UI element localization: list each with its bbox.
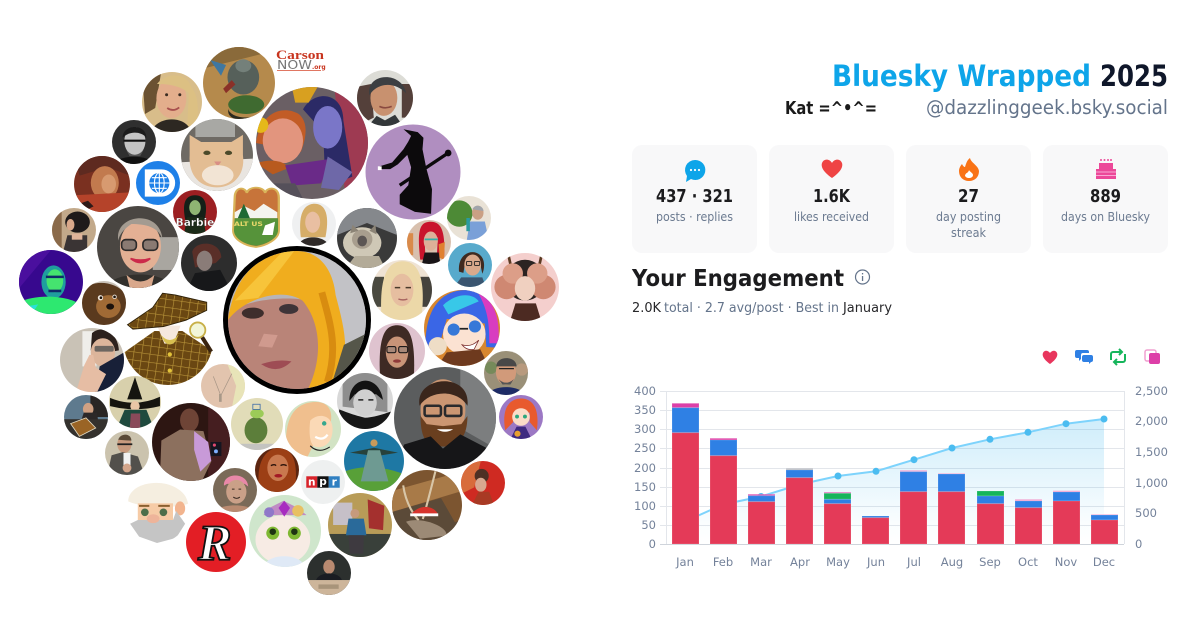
- avatar: dark-haired woman from behind: [52, 208, 96, 252]
- icon: legend reposts: [1111, 349, 1125, 365]
- avatar: man in beanie: [357, 70, 413, 126]
- avatar: two fantasy anime characters: [253, 87, 368, 199]
- left axis labels: 200: [634, 461, 656, 475]
- icon: legend likes: [1043, 351, 1057, 364]
- icon: birthday cake: [1096, 159, 1116, 179]
- avatar: Barbie pin-up: [173, 190, 217, 234]
- month labels: Feb: [713, 555, 733, 569]
- avatar: man taking mirror selfie: [105, 431, 149, 475]
- left axis labels: 300: [634, 422, 656, 436]
- value: 27: [958, 186, 979, 207]
- handle: @dazzlinggeek.bsky.social: [926, 96, 1168, 119]
- logo: CarsonNow.org: [276, 47, 326, 72]
- avatar: blonde woman: [142, 72, 202, 132]
- month labels: [675, 555, 1115, 569]
- avatar: flower crown creature: [249, 495, 321, 567]
- avatar: cartoon brunette with glasses: [448, 243, 492, 287]
- bar: Feb: [710, 438, 737, 544]
- avatar: red-haired glam portrait: [255, 448, 299, 492]
- bar: Jan: [672, 403, 699, 544]
- avatar: black and white woman: [337, 373, 393, 429]
- cumulative line: [685, 416, 1108, 522]
- label: days on Bluesky: [1061, 210, 1150, 224]
- avatar: witch hat figure: [109, 376, 161, 428]
- month labels: Aug: [941, 555, 963, 569]
- chart: monthly engagement stacked bars with cumulative line: [634, 384, 1168, 569]
- right axis labels: 0: [1135, 537, 1142, 551]
- avatar: painted miniature: [203, 47, 275, 121]
- avatar: necklace on pale skin: [201, 364, 245, 408]
- display name: Kat =^•^=: [785, 98, 877, 119]
- bar: Nov: [1053, 491, 1080, 544]
- left axis labels: 150: [634, 480, 656, 494]
- label: streak: [951, 226, 986, 240]
- icon: info: [856, 270, 870, 284]
- avatar: antlered curly-haired girl: [491, 253, 559, 321]
- chart legend icons: [1043, 349, 1160, 365]
- icon: heart: [822, 160, 842, 178]
- left axis labels: 100: [634, 499, 656, 513]
- icon: chat bubble: [685, 160, 705, 182]
- avatar: bearded man with glasses: [394, 367, 496, 469]
- logo: CarsonNow.org: NOW: [277, 58, 312, 72]
- left axis labels: 50: [641, 518, 656, 532]
- avatar: pink-haired woman: [213, 468, 257, 512]
- avatar: bearded cartoon old man: [128, 483, 188, 543]
- bar: Dec: [1091, 514, 1118, 544]
- month labels: Oct: [1018, 555, 1038, 569]
- bar: Jul: [900, 470, 927, 544]
- avatar: NPR logo: n: [308, 477, 316, 489]
- month labels: Jan: [675, 555, 694, 569]
- bars: [672, 403, 1118, 544]
- heading: Bluesky Wrapped 2025: Bluesky Wrapped: [832, 59, 1091, 93]
- bar: Mar: [748, 494, 775, 544]
- month labels: Jun: [866, 555, 885, 569]
- value: 437 · 321: [656, 186, 733, 207]
- month labels: Jul: [906, 555, 921, 569]
- avatar: cartoon brunette on pink: [369, 323, 425, 379]
- panel: avatar bubble cloud: [19, 47, 559, 595]
- main avatar: woman with yellow hair: [223, 246, 371, 394]
- bar: Aug: [938, 473, 965, 544]
- avatar: man with glasses, black and white: [112, 120, 156, 164]
- avatar: Barbie pin-up: Barbie: [176, 217, 214, 229]
- panel: likes stat card: [769, 145, 894, 253]
- avatar: blue-pink anime girl with glasses: [424, 290, 500, 366]
- month labels: Nov: [1055, 555, 1077, 569]
- icon: legend replies: [1075, 350, 1093, 364]
- avatar: Alt US National Park badge: ALT US: [234, 221, 263, 228]
- left axis labels: [634, 384, 656, 551]
- right axis labels: 500: [1135, 506, 1157, 520]
- left axis labels: 400: [634, 384, 656, 398]
- label: [936, 210, 1001, 240]
- bar: Jun: [862, 516, 889, 544]
- avatar: cat in cone: [337, 208, 397, 268]
- avatar: NPR logo: p: [319, 476, 327, 488]
- avatar: woman standing outside shop: [328, 493, 392, 557]
- icon: legend quotes: [1145, 350, 1160, 364]
- avatar: purple dancer silhouette: [366, 124, 460, 220]
- engagement summary text: 2.0K: [632, 300, 662, 316]
- bar: Apr: [786, 468, 813, 544]
- avatar: red-haired woman with glasses: [407, 220, 451, 264]
- avatar: neon purple-green portrait: [19, 250, 83, 314]
- avatar: smiling man in blue shirt: [484, 351, 528, 395]
- engagement summary text: total · 2.7 avg/post · Best in: [664, 300, 839, 316]
- area under cumulative line: [685, 419, 1104, 544]
- icon: flame: [959, 158, 979, 181]
- avatar: Sound of Music painting: [344, 431, 404, 491]
- avatar: orange cat: [181, 119, 253, 191]
- avatar: woman with finger to lips: [60, 328, 124, 392]
- bar: Oct: [1015, 499, 1042, 544]
- avatar: platinum blonde woman: [372, 260, 432, 320]
- gridlines and axes: [660, 391, 1124, 544]
- label: posts · replies: [656, 210, 733, 224]
- avatar: blue globe logo: [136, 161, 180, 205]
- right axis labels: 1,500: [1135, 445, 1168, 459]
- right axis labels: 2,500: [1135, 384, 1168, 398]
- avatar: smiling woman with glasses: [97, 206, 179, 288]
- avatar: red R logo: R: [197, 515, 232, 571]
- avatar: man in purple-lit room: [152, 403, 230, 481]
- logo: CarsonNow.org: .org: [312, 64, 326, 71]
- month labels: May: [826, 555, 850, 569]
- avatar: orange-haired anime girl: [499, 395, 543, 439]
- avatar: Alt US National Park badge: [233, 188, 279, 247]
- bar: Sep: [977, 491, 1004, 544]
- heading: Your Engagement: Your Engagement: [631, 264, 844, 292]
- avatar: red R logo: [186, 512, 246, 572]
- avatar: red album art: [74, 156, 130, 212]
- right axis labels: 2,000: [1135, 414, 1168, 428]
- left axis labels: 0: [649, 537, 656, 551]
- right axis labels: [1135, 384, 1168, 551]
- heading: Bluesky Wrapped 2025: 2025: [1100, 59, 1168, 93]
- avatar: dark anime character: [181, 235, 237, 291]
- avatar: blonde woman on grey: [292, 202, 336, 246]
- avatar: peach-haired anime woman: [285, 401, 341, 457]
- avatar: stuffed elk with santa hat: [392, 470, 462, 540]
- avatar: NPR logo: [301, 460, 345, 504]
- value: 1.6K: [813, 186, 851, 207]
- month labels: Sep: [979, 555, 1001, 569]
- panel: posting streak stat card: [906, 145, 1031, 253]
- left axis labels: 250: [634, 441, 656, 455]
- avatar: dachshund dog: [82, 281, 126, 325]
- panel: days on Bluesky stat card: [1043, 145, 1168, 253]
- panel: posts and replies stat card: [632, 145, 757, 253]
- avatar: plaid detective: [124, 293, 212, 385]
- avatar: green turtle drawing: [231, 398, 283, 450]
- bar: May: [824, 492, 851, 544]
- month labels: Mar: [750, 555, 772, 569]
- avatar: NPR logo: r: [332, 477, 338, 489]
- avatar: woman with red feathers: [461, 461, 505, 505]
- left axis labels: 350: [634, 403, 656, 417]
- month labels: Dec: [1093, 555, 1115, 569]
- value: 889: [1090, 186, 1121, 207]
- logo: CarsonNow.org: Carson: [276, 47, 325, 62]
- label: likes received: [794, 210, 869, 224]
- avatar: birthday book: [64, 395, 108, 439]
- engagement summary text: January: [842, 300, 892, 316]
- right axis labels: 1,000: [1135, 476, 1168, 490]
- month labels: Apr: [790, 555, 810, 569]
- label: day posting: [936, 210, 1001, 224]
- avatar: man with plant: [446, 196, 491, 240]
- avatar: man at table: [307, 551, 351, 595]
